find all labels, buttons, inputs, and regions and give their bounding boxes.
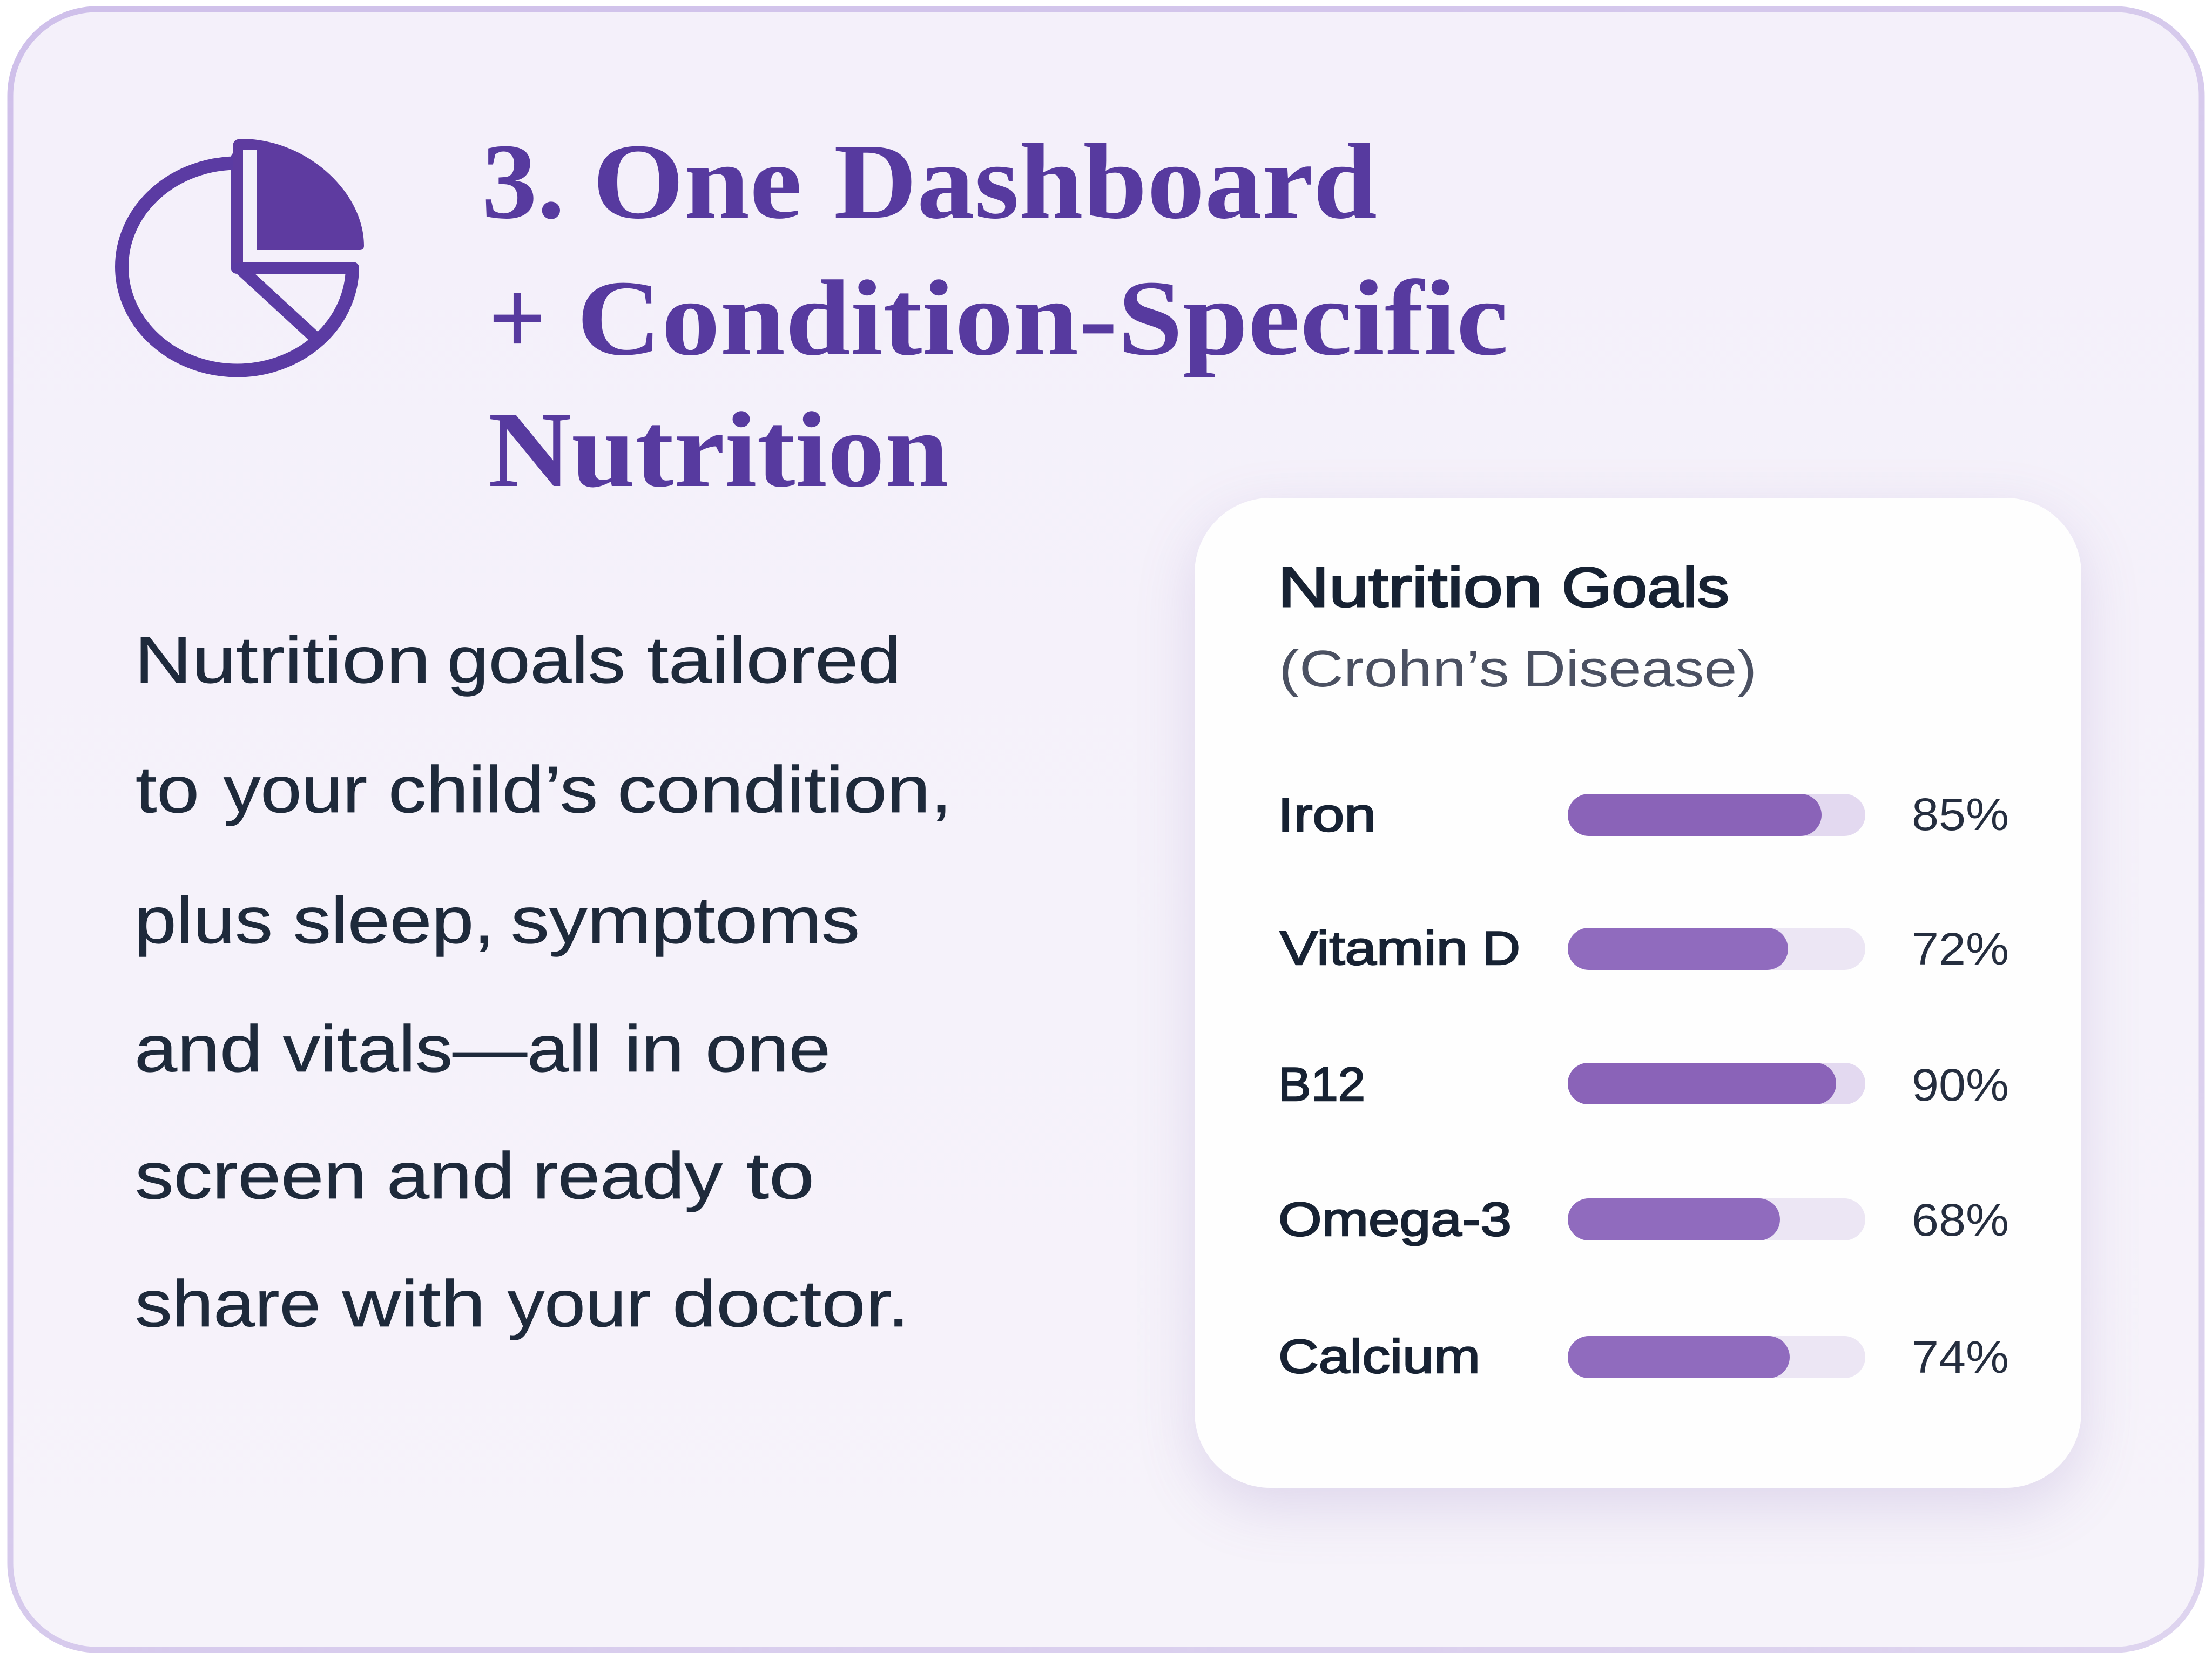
card heading: Goals — [1562, 556, 1729, 619]
row: B12 90%: B12 — [1278, 1057, 1365, 1111]
text block: description: symptoms — [511, 884, 860, 957]
text block: description: to — [746, 1139, 814, 1212]
icon: pie chart — [122, 139, 364, 370]
row: calcium 74% — [1278, 1330, 2009, 1383]
text block: description: vitals—all — [283, 1012, 602, 1085]
card subheading: (Crohn’s — [1279, 640, 1509, 698]
text block: description: in — [624, 1012, 684, 1085]
heading: Condition-Specific — [577, 259, 1508, 378]
text block: description: Nutrition — [134, 623, 430, 697]
card heading: Nutrition — [1278, 556, 1542, 619]
row: iron 85%: Iron — [1278, 788, 1376, 841]
text block: description: child’s — [388, 753, 598, 826]
card: nutrition goals — [1195, 498, 2081, 1507]
heading — [482, 122, 1508, 510]
card subheading — [1279, 640, 1757, 698]
card subheading: Disease) — [1523, 640, 1757, 698]
heading: 3. — [482, 122, 565, 241]
heading: One — [592, 122, 802, 241]
text block: description: and — [387, 1139, 515, 1212]
text block: description: your — [508, 1267, 651, 1340]
heading: + — [488, 259, 546, 378]
row: omega-3 68%: 68% — [1912, 1195, 2009, 1245]
text block: description: to — [136, 753, 199, 826]
text block: description: share — [135, 1267, 321, 1340]
row: iron 85% — [1278, 788, 2009, 841]
row: omega-3 68% — [1278, 1192, 2009, 1246]
heading: Dashboard — [834, 122, 1377, 241]
row: omega-3 68%: Omega-3 — [1278, 1192, 1512, 1246]
text block: description: ready — [532, 1139, 723, 1212]
text block: description: goals — [447, 623, 625, 697]
text block: description: screen — [135, 1139, 367, 1212]
row: B12 90%: 90% — [1912, 1060, 2009, 1110]
row: B12 90% — [1278, 1057, 2009, 1111]
heading: Nutrition — [488, 390, 949, 510]
row: vitamin D 72% — [1280, 921, 2009, 975]
text block: description: doctor. — [672, 1267, 909, 1340]
row: vitamin D 72%: 72% — [1912, 923, 2009, 974]
card heading — [1278, 556, 1729, 619]
text block: description: with — [342, 1267, 485, 1340]
text block: description: and — [134, 1012, 262, 1085]
text block: description: plus — [134, 884, 273, 957]
text block: description: your — [224, 753, 367, 826]
text block: description: condition, — [617, 753, 952, 826]
text block: description: one — [705, 1012, 831, 1085]
text block: description: sleep, — [293, 884, 495, 957]
text block: description — [134, 623, 952, 1340]
text block: description: tailored — [647, 623, 901, 697]
row: iron 85%: 85% — [1912, 789, 2009, 840]
row: calcium 74%: Calcium — [1278, 1330, 1480, 1383]
row: vitamin D 72%: Vitamin — [1280, 921, 1468, 975]
bar chart: nutrient progress — [1278, 788, 2009, 1383]
row: calcium 74%: 74% — [1912, 1332, 2009, 1382]
row: vitamin D 72%: D — [1482, 921, 1520, 975]
